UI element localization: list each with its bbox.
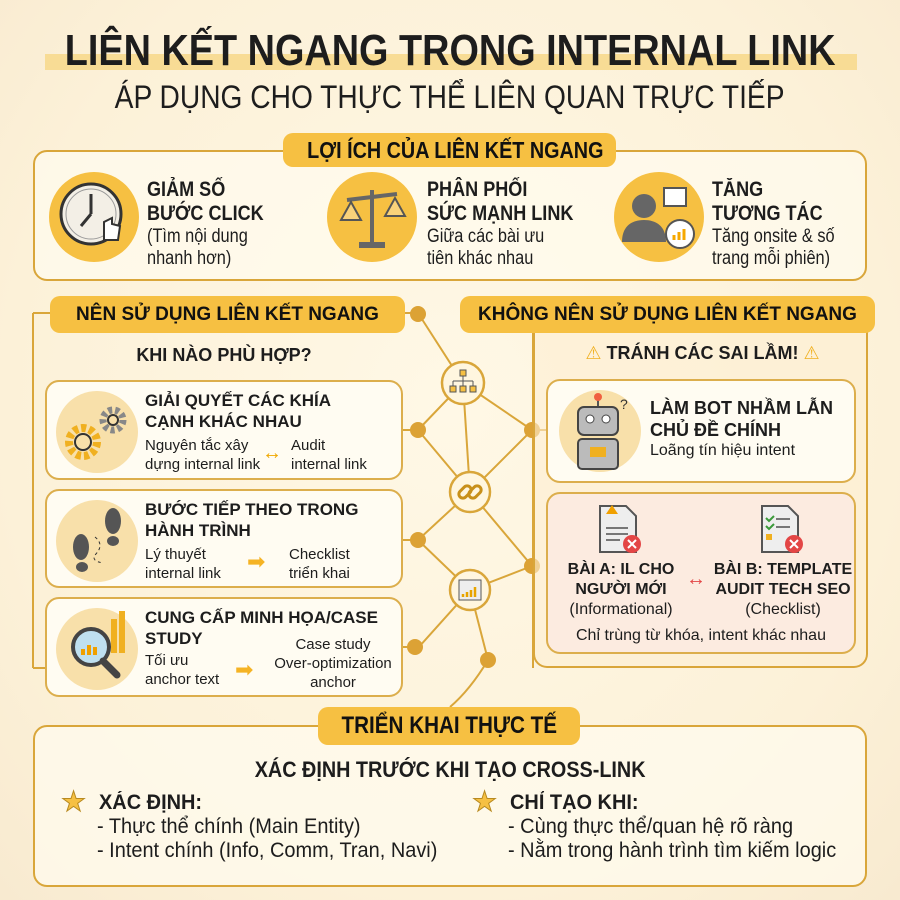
card: bot nham lan: Loãng tín hiệu intent <box>650 442 795 459</box>
card: giai quyet <box>45 380 403 480</box>
card: cung cap minh hoa <box>45 597 403 697</box>
heading: xac dinh truoc: XÁC ĐỊNH TRƯỚC KHI TẠO CROSS-LINK <box>255 757 645 782</box>
card: bai A vs bai B <box>546 492 856 654</box>
card: bot nham lan: CHỦ ĐỀ CHÍNH <box>650 420 781 440</box>
benefit: phan phoi <box>327 172 574 269</box>
card: bai A vs bai B: AUDIT TECH SEO <box>715 581 851 598</box>
icon: footprints <box>56 500 138 582</box>
card: buoc tiep theo: HÀNH TRÌNH <box>145 521 251 540</box>
benefit: giam so buoc click <box>49 172 264 269</box>
benefit: tang tuong tac: Tăng onsite & số <box>712 226 835 247</box>
icon: person chart <box>614 172 704 262</box>
block: chi tao khi <box>472 786 836 862</box>
card: bai A vs bai B: BÀI B: TEMPLATE <box>714 561 852 578</box>
block: xac dinh: - Thực thể chính (Main Entity) <box>97 815 361 838</box>
card: giai quyet: ↔ <box>262 442 282 464</box>
card: buoc tiep theo: internal link <box>145 565 221 582</box>
benefit: phan phoi: tiên khác nhau <box>427 248 533 269</box>
benefit: tang tuong tac: trang mỗi phiên) <box>712 248 830 269</box>
benefit: giam so buoc click: BƯỚC CLICK <box>147 202 264 225</box>
benefit: phan phoi: Giữa các bài ưu <box>427 226 544 247</box>
title: LIÊN KẾT NGANG TRONG INTERNAL LINK <box>65 26 835 75</box>
pill: loi ich: LỢI ÍCH CỦA LIÊN KẾT NGANG <box>307 137 603 163</box>
benefit: giam so buoc click: nhanh hơn) <box>147 248 231 269</box>
panel: khong nen <box>533 315 868 668</box>
icon: network sitemap node <box>440 360 486 406</box>
card: bai A vs bai B: ↔ <box>686 568 706 590</box>
benefit: giam so buoc click: (Tìm nội dung <box>147 226 248 247</box>
heading: khi nao phu hop: KHI NÀO PHÙ HỢP? <box>136 345 312 365</box>
block: xac dinh: XÁC ĐỊNH: <box>99 791 202 814</box>
benefit: tang tuong tac: TĂNG <box>712 178 763 201</box>
panel: trien khai <box>33 725 867 887</box>
pill: khong nen su dung <box>460 296 875 333</box>
pill: trien khai thuc te: TRIỂN KHAI THỰC TẾ <box>341 712 557 739</box>
pill: khong nen su dung: KHÔNG NÊN SỬ DỤNG LIÊN KẾT NGANG <box>478 304 857 325</box>
block: xac dinh: - Intent chính (Info, Comm, Tran, Navi) <box>97 839 437 862</box>
card: buoc tiep theo: triển khai <box>289 565 350 582</box>
icon: robot <box>559 390 641 472</box>
card: bai A vs bai B: Chỉ trùng từ khóa, intent khác nhau <box>576 627 826 644</box>
icon: doc checklist <box>761 505 803 553</box>
card: buoc tiep theo: BƯỚC TIẾP THEO TRONG <box>145 500 358 519</box>
block: chi tao khi: ★ <box>472 786 497 817</box>
card: cung cap minh hoa: Tối ưu <box>145 652 188 669</box>
icon: chain link node <box>448 470 492 514</box>
card: giai quyet: Audit <box>291 437 325 454</box>
card: buoc tiep theo: ➡ <box>247 549 265 574</box>
pill: nen su dung: NÊN SỬ DỤNG LIÊN KẾT NGANG <box>76 304 379 325</box>
card: cung cap minh hoa: Over-optimization <box>274 655 392 672</box>
pill: nen su dung <box>50 296 405 333</box>
block: chi tao khi: CHỈ TẠO KHI: <box>510 791 639 814</box>
icon: robot: ? <box>620 396 628 412</box>
card: buoc tiep theo <box>45 489 403 588</box>
icon: magnifier chart <box>56 608 138 690</box>
benefit: tang tuong tac <box>614 172 835 269</box>
card: giai quyet: GIẢI QUYẾT CÁC KHÍA <box>145 391 331 410</box>
pill: loi ich <box>283 133 616 167</box>
card: bai A vs bai B: BÀI A: IL CHO <box>568 561 674 578</box>
icon: scale <box>327 172 417 262</box>
card: buoc tiep theo: Checklist <box>289 546 350 563</box>
block: chi tao khi: - Cùng thực thể/quan hệ rõ ràng <box>508 815 793 838</box>
icon: doc warning <box>599 505 641 553</box>
icon: gears <box>56 391 138 473</box>
card: cung cap minh hoa: CUNG CẤP MINH HỌA/CASE <box>145 608 378 627</box>
card: bai A vs bai B: (Checklist) <box>745 601 821 618</box>
icon: clock <box>49 172 139 262</box>
heading: tranh cac sai lam: ⚠ TRÁNH CÁC SAI LẦM! ⚠ <box>585 343 820 363</box>
card: bai A vs bai B: NGƯỜI MỚI <box>575 581 667 598</box>
card: cung cap minh hoa: anchor <box>310 674 356 691</box>
benefit: tang tuong tac: TƯƠNG TÁC <box>712 202 823 225</box>
card: giai quyet: CẠNH KHÁC NHAU <box>145 412 302 431</box>
card: cung cap minh hoa: STUDY <box>145 629 203 648</box>
card: bot nham lan <box>546 379 856 483</box>
card: bot nham lan: LÀM BOT NHẦM LẪN <box>650 398 833 418</box>
panel: benefits <box>33 150 867 281</box>
benefit: phan phoi: PHÂN PHỐI <box>427 178 527 201</box>
card: cung cap minh hoa: Case study <box>295 636 371 653</box>
pill: trien khai thuc te <box>318 707 580 745</box>
card: buoc tiep theo: Lý thuyết <box>145 546 206 563</box>
card: giai quyet: dựng internal link <box>145 456 260 473</box>
icon: chart node <box>448 568 492 612</box>
block: chi tao khi: - Nằm trong hành trình tìm kiếm logic <box>508 839 836 862</box>
card: bai A vs bai B: (Informational) <box>569 601 673 618</box>
card: giai quyet: Nguyên tắc xây <box>145 437 248 454</box>
card: giai quyet: internal link <box>291 456 367 473</box>
card: cung cap minh hoa: anchor text <box>145 671 219 688</box>
card: cung cap minh hoa: ➡ <box>235 657 253 682</box>
block: xac dinh <box>61 786 437 862</box>
benefit: giam so buoc click: GIẢM SỐ <box>147 178 225 201</box>
subtitle: ÁP DỤNG CHO THỰC THỂ LIÊN QUAN TRỰC TIẾP <box>115 79 785 115</box>
benefit: phan phoi: SỨC MẠNH LINK <box>427 202 573 225</box>
block: xac dinh: ★ <box>61 786 86 817</box>
